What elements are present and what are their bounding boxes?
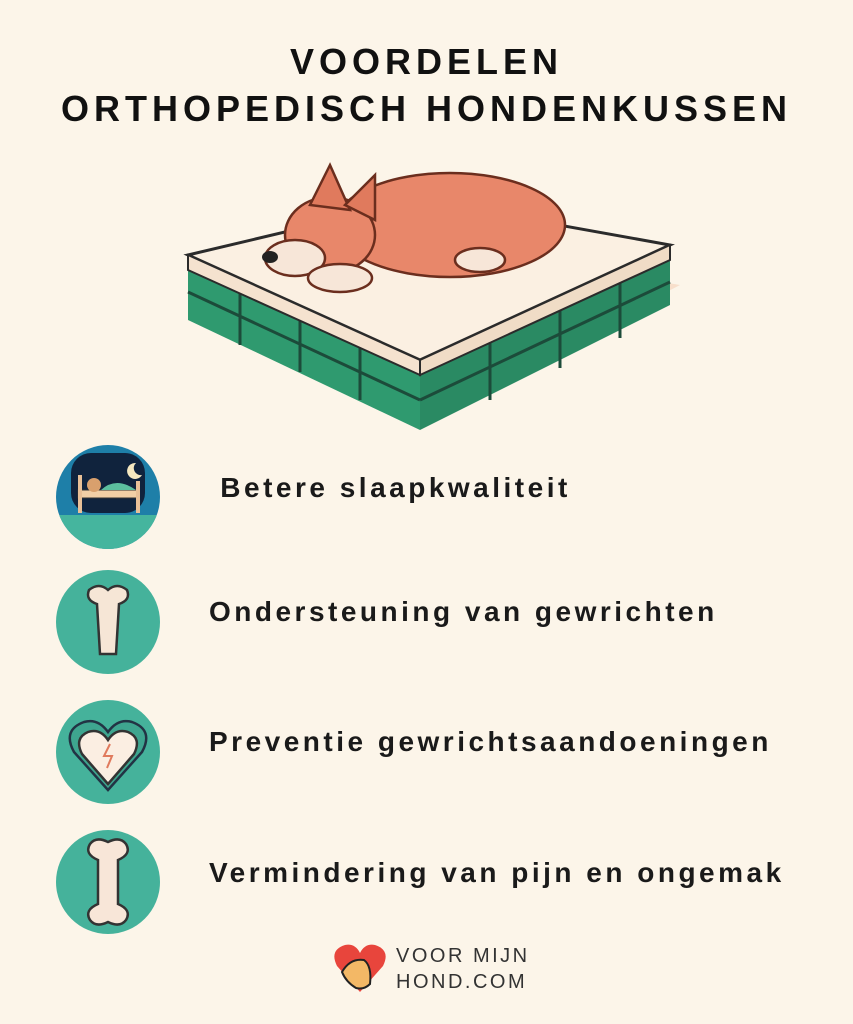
title: ORTHOPEDISCH HONDENKUSSEN	[61, 88, 792, 129]
icon: joint	[56, 570, 160, 674]
title: VOORDELEN	[290, 41, 563, 82]
illustration: dog on mattress	[184, 162, 680, 430]
logo: VOOR MIJN	[396, 945, 530, 967]
dog	[265, 165, 565, 292]
icon: heart	[56, 700, 160, 804]
label 1: Betere slaapkwaliteit	[220, 472, 571, 503]
title	[61, 41, 792, 129]
label 4: Vermindering van pijn en ongemak	[209, 857, 785, 888]
logo: HOND.COM	[396, 971, 527, 993]
label 3: Preventie gewrichtsaandoeningen	[209, 726, 772, 757]
icon: sleep	[56, 445, 160, 549]
icon: bone	[56, 830, 160, 934]
label 2: Ondersteuning van gewrichten	[209, 596, 718, 627]
logo	[334, 944, 530, 993]
